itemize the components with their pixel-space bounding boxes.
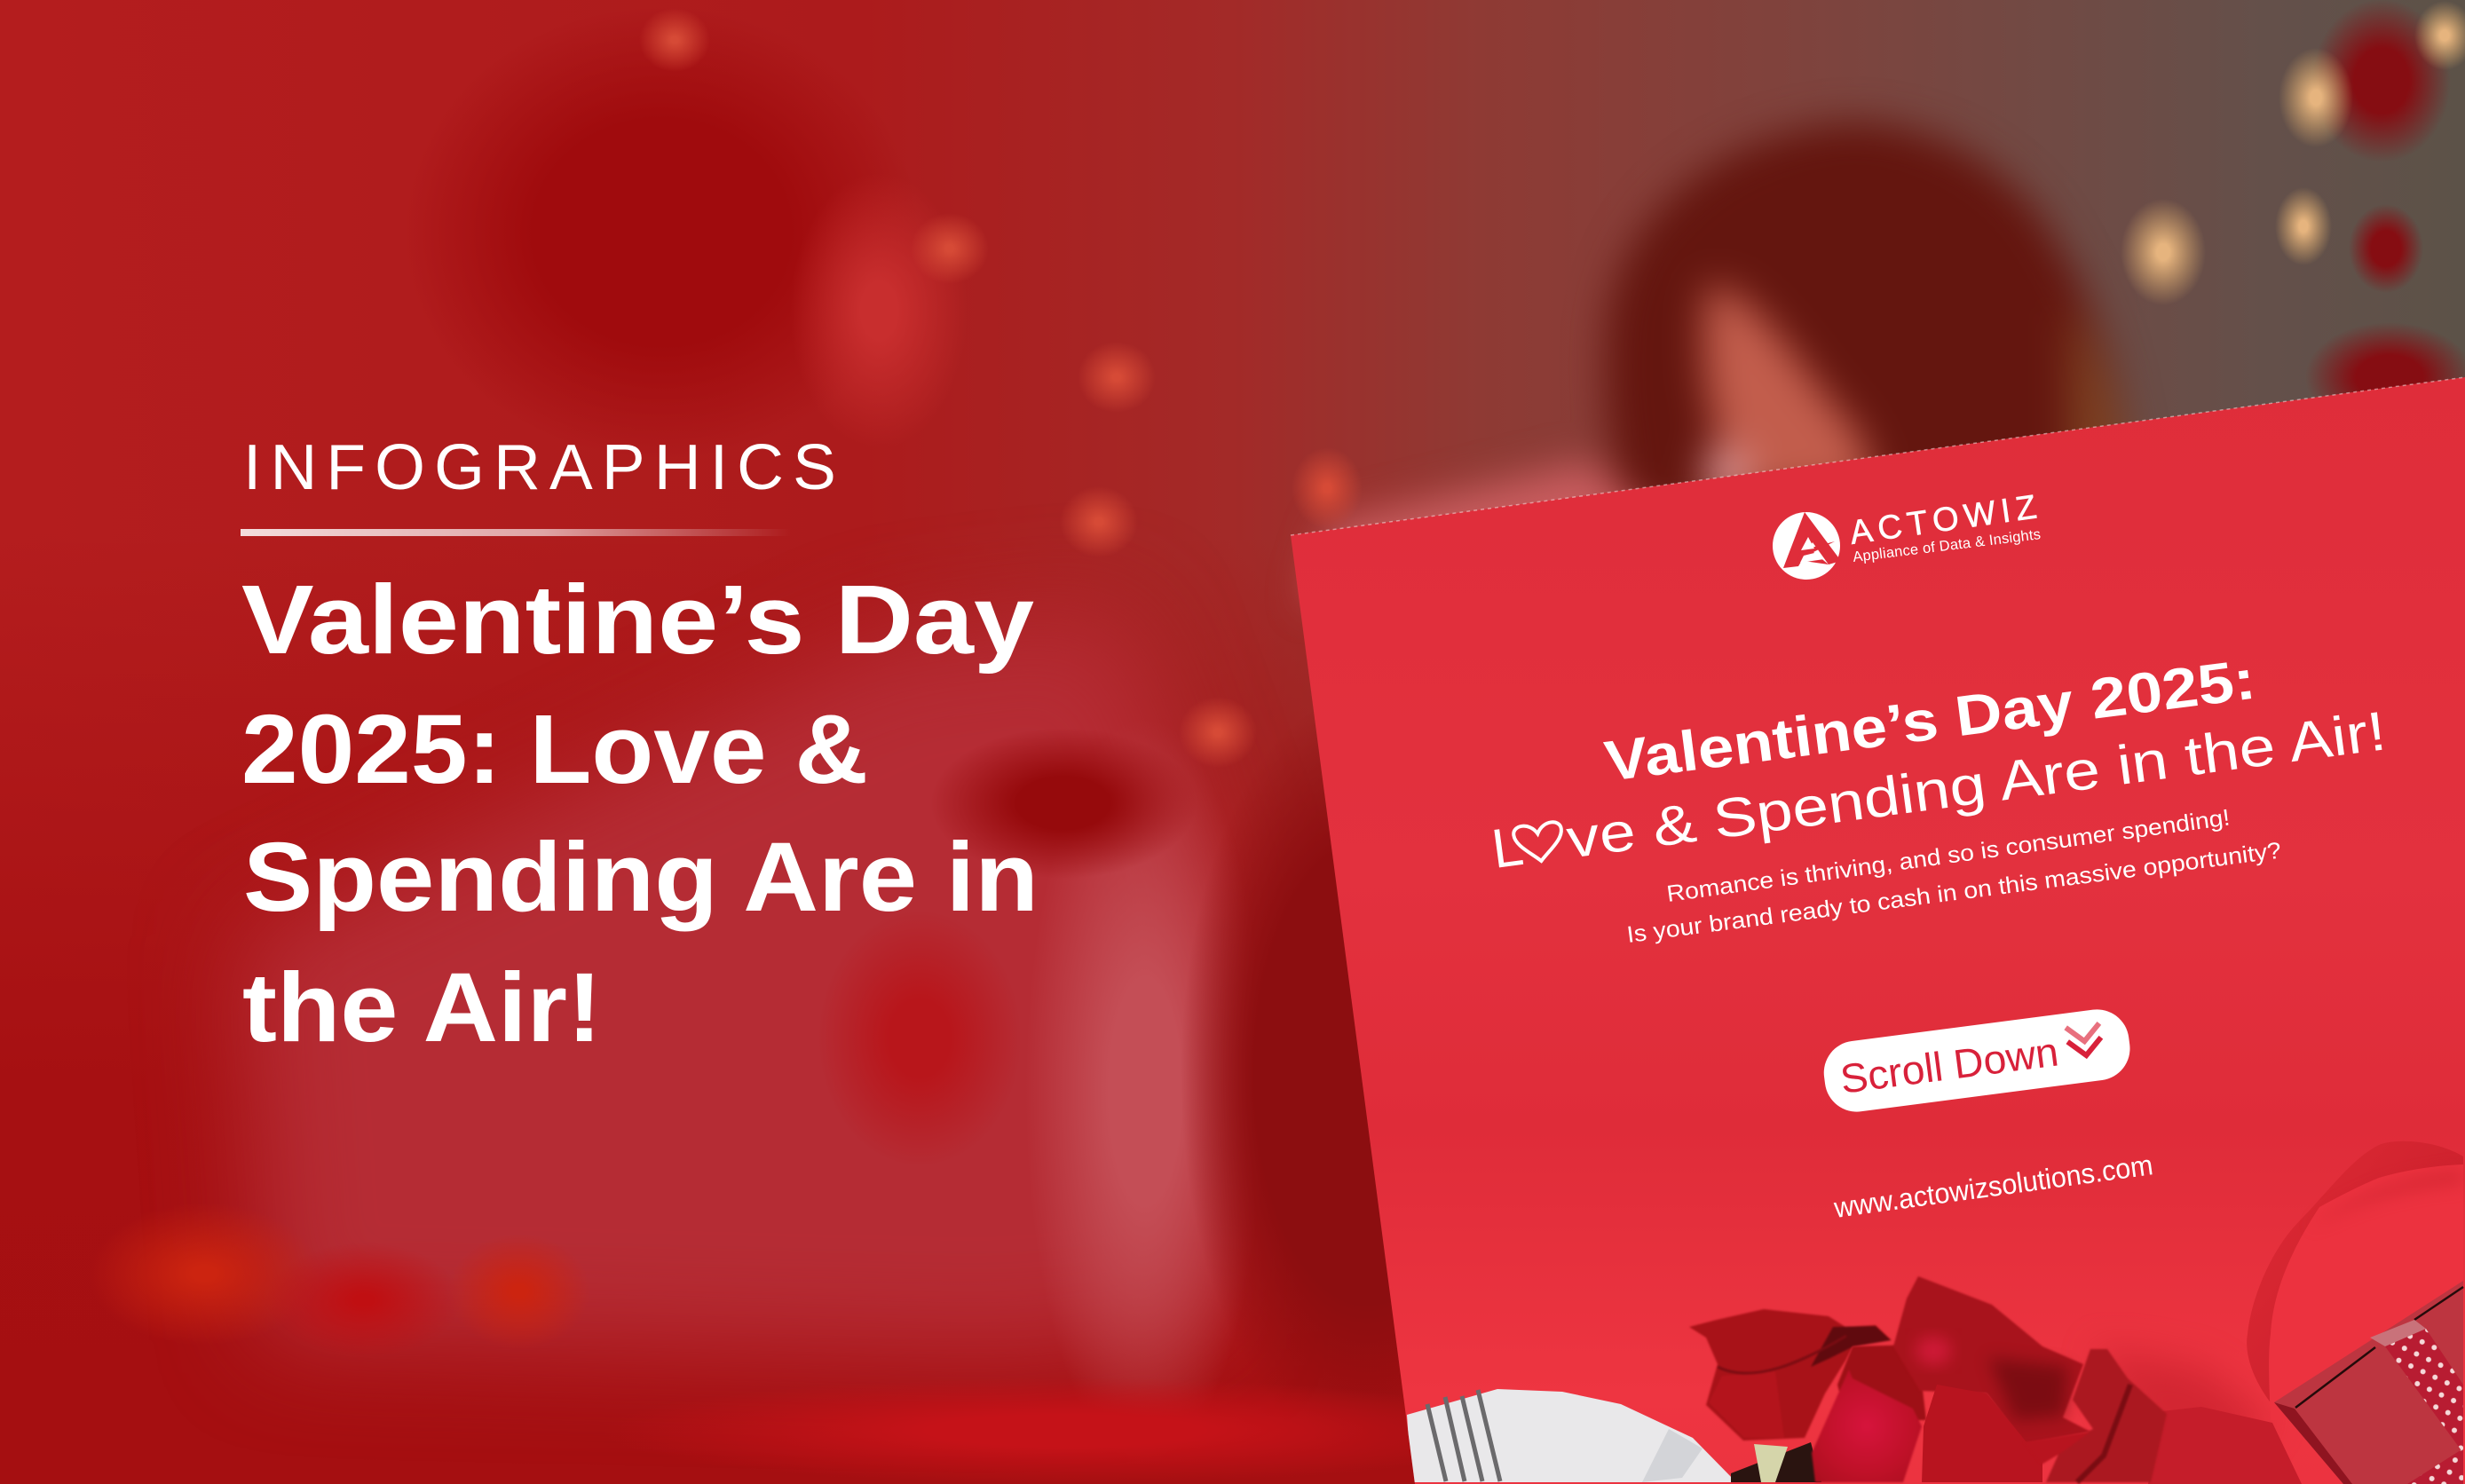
website url: www.actowizsolutions.com [1831, 1149, 2155, 1224]
logo tagline: Appliance of Data & Insights [1852, 526, 2042, 565]
red box [2148, 1407, 2302, 1484]
ribbon heart [2247, 1141, 2463, 1420]
rose five [2024, 1349, 2167, 1482]
underline rule [241, 529, 791, 536]
icon: double chevron [2066, 1023, 2103, 1058]
logo icon [1773, 512, 1841, 580]
rose four [1922, 1385, 2042, 1482]
card title line 2: ve & Spending Are in the Air! [1563, 700, 2390, 871]
gift box [2274, 1281, 2463, 1484]
main title: Valentine’s Day [241, 565, 1034, 675]
icon: heart in love [1513, 821, 1565, 864]
kicker: infographics: INFOGRAPHICS [243, 432, 845, 503]
blurred floor petals [89, 1203, 590, 1358]
card subtitle: Is your brand ready to cash in on this massive opportunity? [1625, 837, 2283, 948]
rose two [1812, 1345, 1926, 1482]
main title [241, 565, 1039, 1062]
tilted flyer card [1291, 377, 2465, 1484]
logo [1773, 488, 2044, 580]
heading block [241, 432, 1039, 1062]
card title line 2 [1489, 700, 2390, 880]
rose three [1893, 1276, 2090, 1444]
bokeh lights [639, 1, 2465, 768]
fork [1427, 1390, 1500, 1481]
string-light hearts [2305, 0, 2465, 432]
main title: Spending Are in [243, 823, 1039, 932]
napkin [1407, 1389, 1736, 1482]
roses [1689, 1276, 2167, 1482]
main title: 2025: Love & [241, 695, 868, 804]
rose one [1689, 1309, 1892, 1441]
card title line 2: L [1489, 816, 1527, 880]
card subtitle [1625, 803, 2283, 948]
soft shadow behind roses [2111, 1347, 2266, 1421]
main title: the Air! [242, 953, 602, 1062]
card subtitle: Romance is thriving, and so is consumer spending! [1665, 803, 2232, 907]
scroll down button [1820, 1006, 2134, 1116]
logo wordmark: ACTOWIZ [1847, 488, 2044, 552]
rose stem [1731, 1442, 1821, 1482]
button label: Scroll Down [1837, 1028, 2061, 1102]
table setting photo [1407, 1141, 2463, 1484]
card title line 1: Valentine’s Day 2025: [1601, 647, 2259, 793]
